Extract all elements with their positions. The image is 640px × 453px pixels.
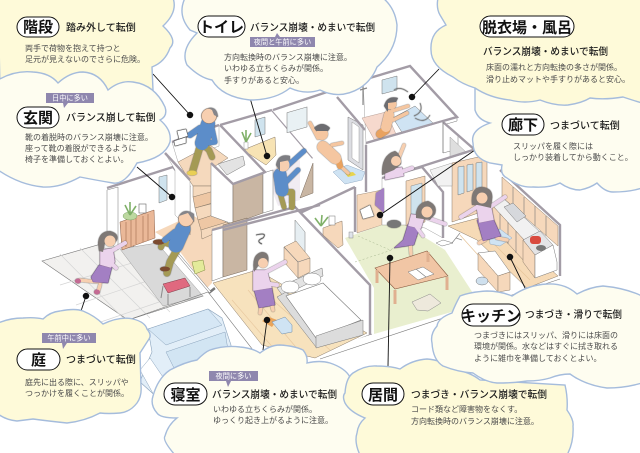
- panel: 玄関: バランス崩して転倒: [66, 111, 156, 124]
- leader: 庭: [80, 293, 89, 314]
- panel: 玄関: 座って靴の着脱ができるように: [25, 143, 136, 153]
- person: man in washroom: [310, 123, 348, 173]
- kitchen: [430, 155, 560, 292]
- panel: 脱衣場・風呂: 脱衣場・風呂: [482, 18, 572, 36]
- panel: トイレ: 手すりがあると安心。: [224, 75, 304, 85]
- panel: キッチン: 環境が関係。水などはすぐに拭き取れる: [474, 341, 618, 351]
- stairs: [165, 125, 231, 239]
- washroom: [272, 80, 366, 184]
- panel: 脱衣場・風呂: [431, 0, 640, 105]
- entrance tile floor: [42, 238, 560, 372]
- panel: 寝室: 寝室: [170, 386, 201, 404]
- person: man on stairs: [174, 108, 218, 176]
- panel: キッチン: ように雑巾を準備しておくとよい。: [474, 353, 602, 363]
- panel: 庭: つっかけを履くことが関係。: [25, 388, 129, 398]
- car: [140, 309, 231, 400]
- illustration: cutaway house: [42, 66, 560, 400]
- panel: 廊下: つまづいて転倒: [550, 119, 620, 132]
- cushion: [412, 294, 441, 311]
- person: woman in kitchen: [461, 187, 507, 243]
- tag: 午前中に多い: [42, 333, 96, 349]
- panel: 階段: 踏み外して転倒: [66, 21, 136, 34]
- island counter: [476, 251, 510, 292]
- genkan room: [107, 167, 215, 292]
- bedroom: [212, 207, 370, 372]
- person: woman on tile: [75, 231, 125, 294]
- panel: 居間: つまづき・バランス崩壊で転倒: [411, 388, 547, 401]
- tag: 夜間と午前に多い: [250, 33, 315, 47]
- panel: 脱衣場・風呂: バランス崩壊・めまいで転倒: [483, 45, 608, 58]
- panel: トイレ: [182, 0, 397, 100]
- shoe cabinet and plant: [120, 202, 155, 250]
- stove: [523, 231, 557, 278]
- panel: 居間: 方向転換時のバランス崩壊に注意。: [411, 416, 539, 426]
- panel: キッチン: キッチン: [461, 308, 521, 325]
- panel: 脱衣場・風呂: 滑り止めマットや手すりがあると安心。: [486, 74, 630, 84]
- panel: 居間: コード類など障害物をなくす。: [411, 404, 522, 414]
- toilet room: [211, 110, 313, 224]
- backsplash panels: [502, 177, 558, 246]
- panel: キッチン: [432, 284, 640, 388]
- person: woman in living room: [387, 201, 445, 254]
- person: woman in bedroom: [253, 234, 285, 313]
- small shelf with plant: [315, 215, 353, 248]
- red stool: [161, 278, 190, 305]
- tag: 日中に多い: 日中に多い: [52, 94, 88, 102]
- leader: キッチン: [507, 254, 526, 290]
- panel: 庭: つまづいて転倒: [66, 353, 136, 366]
- panel: 玄関: [0, 72, 170, 187]
- person: man in bath: [380, 88, 430, 134]
- leader lines and dots: [80, 69, 526, 366]
- low table: [375, 251, 448, 304]
- panel: 廊下: 廊下: [508, 117, 538, 134]
- person: woman in hallway: [360, 145, 412, 219]
- panel: 庭: 庭先に出る際に、スリッパや: [25, 377, 129, 387]
- panel: 寝室: [152, 345, 372, 453]
- person: man at entrance: [153, 211, 194, 273]
- leader: 脱衣場: [409, 69, 439, 100]
- tall cupboard: [452, 155, 487, 222]
- panel: 居間: [344, 359, 573, 453]
- panel: 階段: 足元が見えないのでさらに危険。: [25, 54, 145, 64]
- panel: トイレ: トイレ: [199, 19, 244, 36]
- panel: 寝室: バランス崩壊・めまいで転倒: [212, 388, 337, 401]
- panel: 寝室: いわゆる立ちくらみが関係。: [213, 404, 317, 414]
- leader: 玄関: [137, 167, 175, 200]
- living room: [315, 167, 480, 334]
- house bag: [192, 260, 205, 274]
- sink counter: [492, 197, 540, 262]
- panel: 庭: 庭: [31, 352, 46, 369]
- panel: 階段: 階段: [23, 18, 53, 36]
- hallway: [355, 122, 475, 233]
- panel: 庭: [0, 310, 150, 423]
- panel: 寝室: ゆっくり起き上がるように注意。: [213, 415, 333, 425]
- leader: 階段: [153, 74, 193, 118]
- panel: トイレ: 方向転換時のバランス崩壊に注意。: [224, 52, 352, 62]
- panel: トイレ: いわゆる立ちくらみが関係。: [224, 63, 328, 73]
- panel: キッチン: つまづき・滑りで転倒: [525, 308, 622, 321]
- panel: 玄関: 玄関: [23, 109, 53, 127]
- person: man in toilet: [276, 151, 304, 207]
- tag: 日中に多い: [46, 93, 94, 108]
- panel: キッチン: つまづきにはスリッパ、滑りには床面の: [474, 330, 618, 340]
- tag: 午前中に多い: 午前中に多い: [47, 334, 91, 342]
- leader: 寝室: [263, 317, 270, 350]
- leader: 廊下: [377, 150, 475, 218]
- panel: 玄関: 椅子を準備しておくとよい。: [25, 154, 129, 164]
- panel: 階段: [0, 0, 174, 90]
- panel: 玄関: 靴の着脱時のバランス崩壊に注意。: [25, 132, 153, 142]
- leader: 居間: [387, 255, 393, 366]
- panel: 廊下: スリッパを履く際には: [513, 141, 593, 151]
- bathroom: [360, 66, 457, 195]
- tag: 夜間に多い: [209, 371, 258, 387]
- panel: 廊下: しっかり装着してから動くこと。: [513, 152, 633, 162]
- panel: 居間: 居間: [368, 387, 398, 404]
- panel: トイレ: バランス崩壊・めまいで転倒: [250, 21, 375, 34]
- tag: 夜間と午前に多い: 夜間と午前に多い: [254, 38, 311, 46]
- panel: 廊下: [473, 85, 640, 192]
- panel: 階段: 両手で荷物を抱えて持つと: [25, 43, 121, 53]
- tag: 夜間に多い: 夜間に多い: [216, 372, 251, 380]
- leader: トイレ: [250, 98, 270, 159]
- front wall between rooms: [223, 187, 355, 230]
- panel: 脱衣場・風呂: 床面の濡れと方向転換の多さが関係。: [486, 62, 622, 72]
